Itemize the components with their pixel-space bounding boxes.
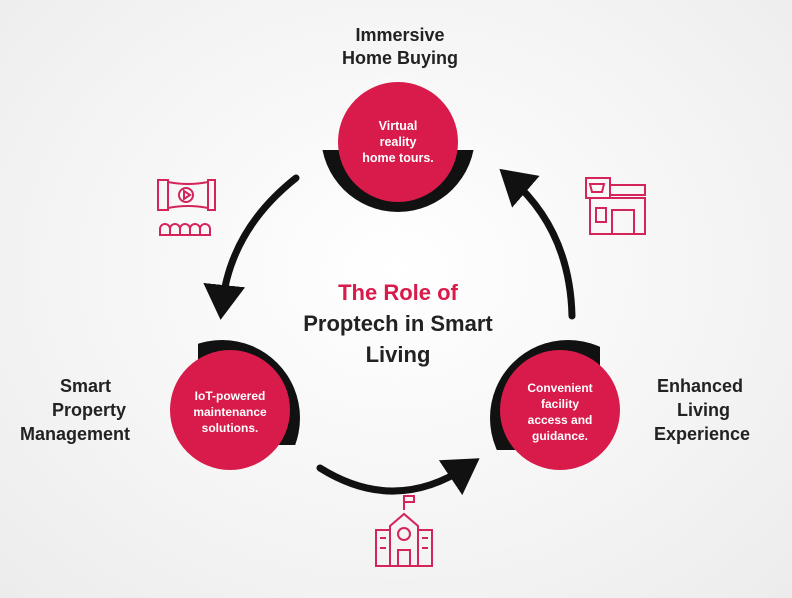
heading: enhanced living experience: Enhanced bbox=[657, 376, 743, 396]
arrow: left bbox=[222, 178, 296, 306]
heading: smart property management: Management bbox=[20, 424, 130, 444]
title bbox=[303, 280, 493, 367]
icon: shop bbox=[586, 178, 645, 234]
node: enhanced living experience: Convenient bbox=[527, 381, 593, 395]
heading: immersive home buying bbox=[342, 25, 458, 68]
arrow: right bbox=[510, 178, 572, 316]
heading: enhanced living experience: Experience bbox=[654, 424, 750, 444]
title: The Role of bbox=[338, 280, 459, 305]
title: Proptech in Smart bbox=[303, 311, 493, 336]
heading: enhanced living experience: Living bbox=[677, 400, 730, 420]
node: enhanced living experience bbox=[490, 340, 620, 470]
heading: enhanced living experience bbox=[654, 376, 750, 444]
node: immersive home buying: home tours. bbox=[362, 151, 434, 165]
heading: immersive home buying: Immersive bbox=[355, 25, 445, 45]
node: smart property management bbox=[170, 340, 300, 470]
node: immersive home buying: reality bbox=[380, 135, 416, 149]
node: smart property management: maintenance bbox=[193, 405, 267, 419]
heading: immersive home buying: Home Buying bbox=[342, 48, 458, 68]
heading: smart property management: Smart bbox=[60, 376, 111, 396]
node: enhanced living experience: access and bbox=[528, 413, 592, 427]
icon: school bbox=[376, 496, 432, 566]
icon: cinema bbox=[158, 180, 215, 235]
node: immersive home buying: Virtual bbox=[379, 119, 417, 133]
node: immersive home buying bbox=[322, 82, 474, 212]
node: smart property management: solutions. bbox=[202, 421, 258, 435]
node: enhanced living experience: facility bbox=[541, 397, 579, 411]
node: enhanced living experience: guidance. bbox=[532, 429, 588, 443]
heading: smart property management bbox=[20, 376, 130, 444]
title: Living bbox=[366, 342, 430, 367]
arrow: bottom bbox=[320, 466, 468, 491]
heading: smart property management: Property bbox=[52, 400, 126, 420]
node: smart property management: IoT-powered bbox=[195, 389, 265, 403]
